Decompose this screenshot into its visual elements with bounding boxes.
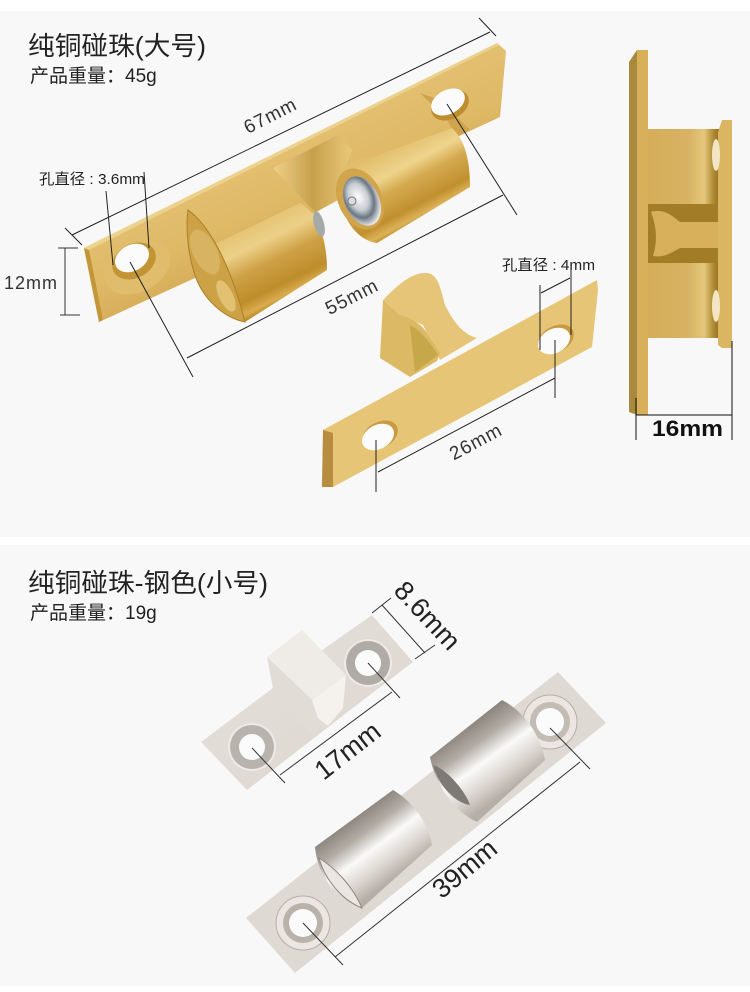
label: 12mm: 12mm [4, 273, 58, 293]
right cylinder [430, 700, 545, 822]
panel: small steel background [0, 545, 750, 986]
brass strike plate [322, 273, 598, 487]
hook top face [383, 273, 477, 360]
inner notch between cylinders [273, 135, 352, 212]
dimension: 16mm [636, 341, 732, 440]
right cylinder [327, 128, 470, 243]
label: 26mm: 26mm [446, 420, 506, 465]
label: hole 3.6mm: 孔直径 : 3.6mm [39, 171, 145, 188]
dimension: 12mm [58, 248, 80, 315]
title: small: 纯铜碰珠-钢色(小号) [28, 568, 268, 598]
brass catch, side view [629, 50, 732, 415]
left cylinder [315, 790, 432, 908]
label: 16mm: 16mm [652, 416, 723, 441]
panel: large brass background [0, 11, 750, 537]
dimension: 67mm [65, 18, 496, 245]
mounting plate [84, 43, 506, 322]
dimension: 26mm [376, 340, 555, 492]
holes [276, 896, 330, 950]
holes [228, 723, 276, 771]
label: 67mm: 67mm [241, 94, 301, 139]
leader lines: hole 4mm [540, 270, 571, 350]
left screw hole [94, 228, 180, 306]
plate [246, 672, 606, 973]
strike holes [533, 319, 579, 359]
title: large: 纯铜碰珠(大号) [28, 31, 206, 61]
plate [322, 280, 598, 487]
label: 8.6mm: 8.6mm [388, 575, 466, 656]
weight: small: 产品重量：19g [30, 602, 157, 624]
left cylinder [184, 203, 327, 322]
steel strike plate [201, 615, 413, 790]
dimension: 39mm [303, 728, 590, 965]
steel ball [327, 161, 393, 237]
right screw hole [426, 83, 474, 127]
label: 55mm: 55mm [322, 275, 382, 320]
brass ball catch, large [84, 43, 506, 322]
leader lines: hole 3.6mm [106, 172, 149, 265]
hook side face [380, 300, 440, 377]
label: 17mm: 17mm [309, 716, 386, 786]
label: hole 4mm: 孔直径 : 4mm [502, 257, 595, 274]
steel ball catch [246, 672, 606, 973]
dimension: 55mm [130, 104, 517, 377]
dimension: 8.6mm [372, 598, 435, 659]
weight: large: 产品重量：45g [30, 65, 157, 87]
label: 39mm: 39mm [426, 833, 503, 904]
dimension: 17mm [252, 663, 400, 783]
plate [201, 615, 413, 790]
hook [267, 630, 346, 700]
